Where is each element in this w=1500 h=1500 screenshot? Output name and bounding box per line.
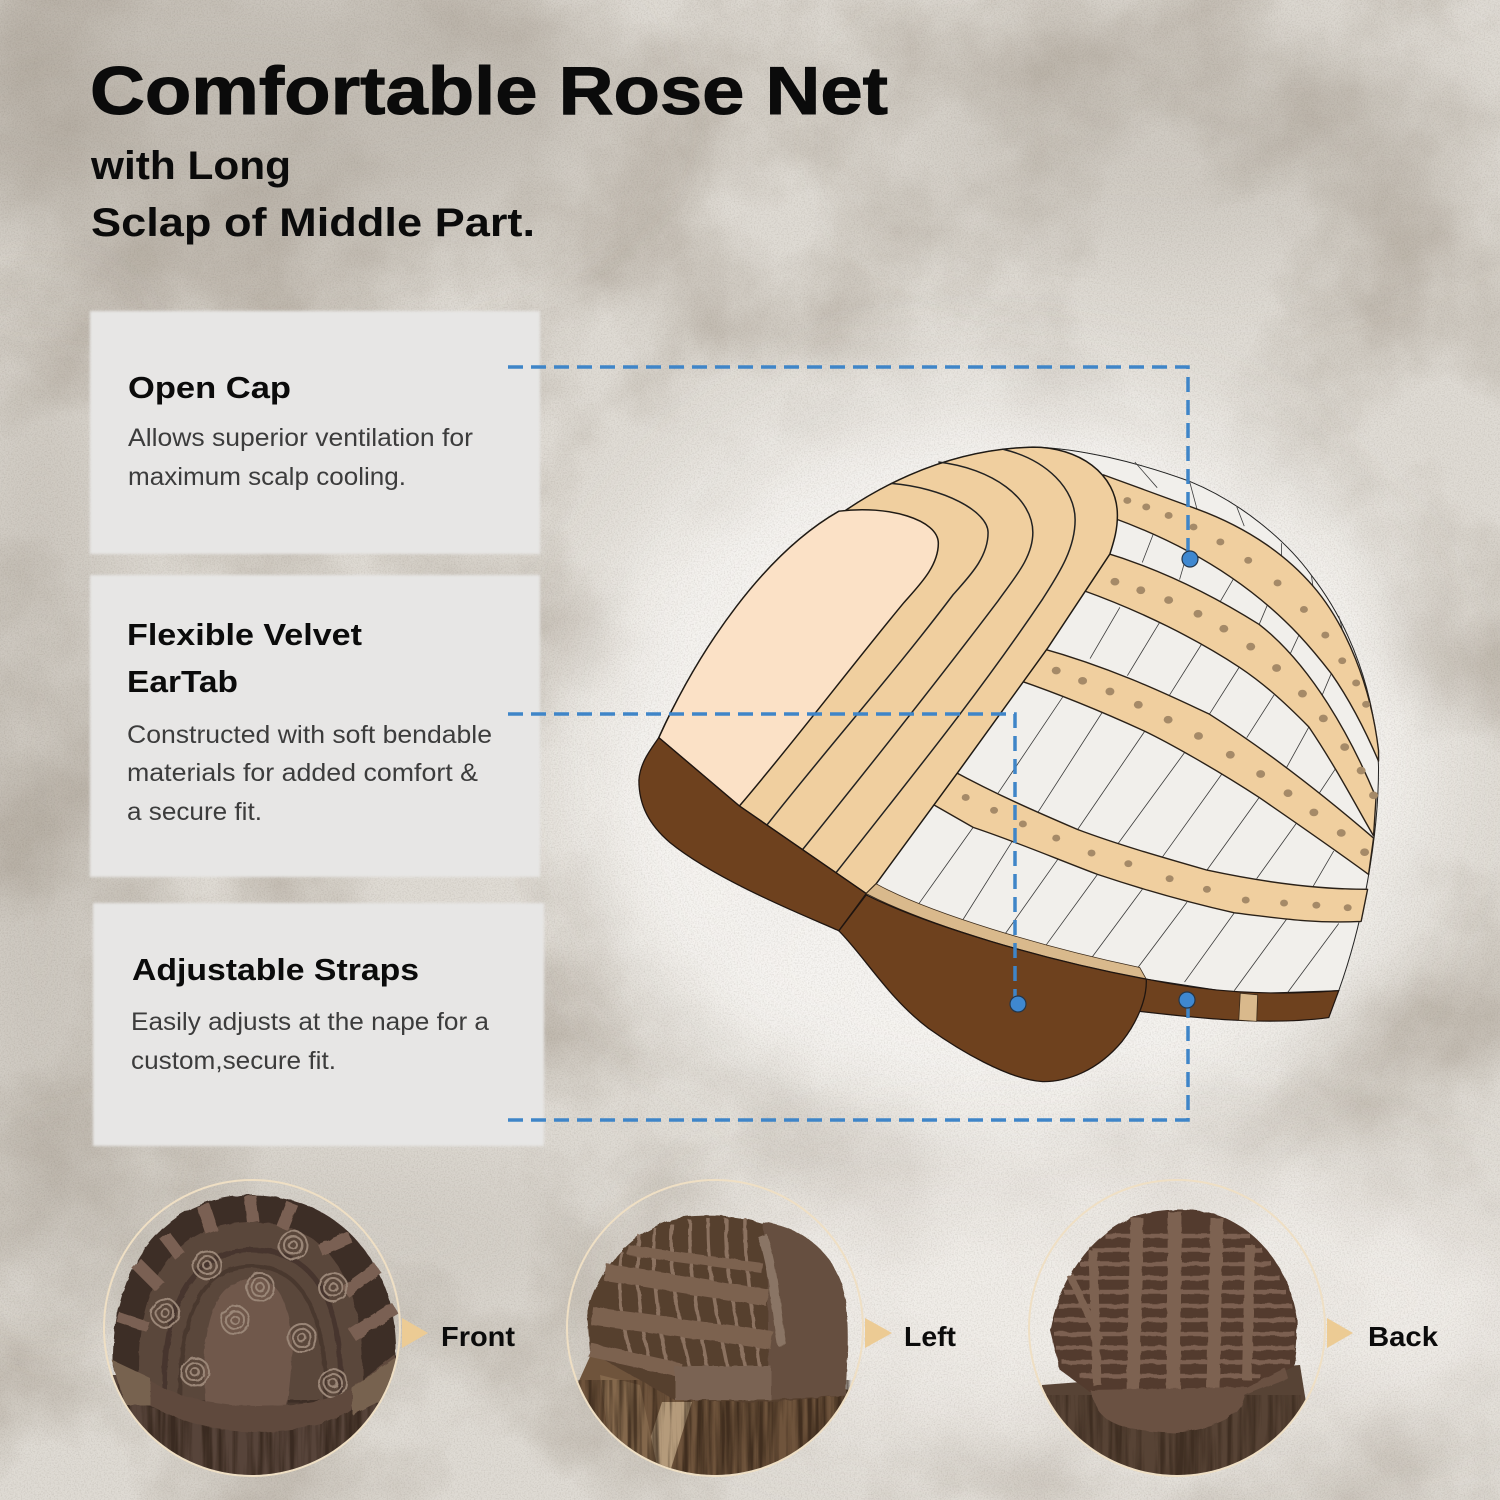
callout line: open cap [508,367,1188,552]
ear tab [675,1366,771,1400]
text: ear tab description: Constructed with soft bendable [127,721,492,749]
strap band 1 [1103,475,1379,761]
rose spirals [151,1231,347,1397]
net rungs [620,1218,760,1370]
vertical straps [1070,1212,1250,1392]
text: open cap description [128,424,473,491]
front brown band [639,738,866,931]
subtitle [90,144,535,245]
lace front tan panel [659,447,1117,894]
arrow: front [402,1318,428,1348]
silk top peach panel [659,510,938,806]
callout line: adjustable straps [508,1003,1188,1120]
strap buckle [1239,993,1258,1021]
subtitle: with Long [90,144,291,188]
arrow: left [865,1318,892,1348]
back adjustable strap [1137,979,1339,1021]
panel: flexible velvet ear tab [90,575,540,877]
cap dome [113,1195,396,1422]
text: open cap description: maximum scalp cooling. [128,463,406,491]
callout dot: open cap [1182,551,1198,567]
text: adjustable straps description: Easily adjusts at the nape for a [131,1008,489,1036]
hair [112,1375,392,1475]
cap dome [1050,1210,1297,1392]
text: adjustable straps description: custom,secure fit. [131,1047,336,1075]
text: ear tab description [127,721,492,826]
net lines [918,462,1342,994]
arrow: back [1327,1318,1353,1348]
center panel [204,1278,292,1410]
heading: flexible velvet ear tab [127,617,362,699]
elastic band [113,1355,400,1432]
callout dot: adjustable straps [1179,992,1195,1008]
heading: adjustable straps: Adjustable Straps [132,952,419,987]
text: adjustable straps description [131,1008,489,1075]
strap band 3 [1018,648,1374,874]
radial straps [118,1196,395,1335]
right lace panel [762,1222,848,1400]
tan edge strip [866,884,1146,979]
text: ear tab description: a secure fit. [127,798,262,826]
lace rings [138,1222,363,1400]
strap band 2 [1083,552,1376,836]
strap perforation dots [962,497,1378,911]
text: open cap description: Allows superior ventilation for [128,424,473,452]
velvet ear tab [839,895,1146,1082]
cap dome [587,1216,847,1402]
title: Comfortable Rose Net [90,53,888,129]
callout dot: ear tab [1010,996,1026,1012]
horizontal rungs [1054,1236,1295,1376]
photo: left view [560,1180,870,1490]
hair [578,1356,852,1475]
hair [1030,1365,1325,1490]
label: front: Front [441,1321,515,1352]
open net base [659,447,1379,994]
label: back: Back [1368,1321,1438,1352]
label: left: Left [904,1321,956,1352]
strap band 4 [928,770,1368,922]
photo: front view [100,1180,405,1485]
cap diagram [639,447,1379,1082]
heading: flexible velvet ear tab: Flexible Velvet [127,617,362,652]
panel: open cap [90,311,540,554]
panel: adjustable straps [93,903,544,1146]
heading: open cap: Open Cap [128,370,291,405]
heading: flexible velvet ear tab: EarTab [127,664,238,699]
panel contour lines [767,449,1075,872]
nape strap [1090,1368,1288,1433]
text: ear tab description: materials for added comfort & [127,759,478,787]
straps [590,1250,772,1370]
callout line: ear tab [508,714,1015,998]
subtitle: Sclap of Middle Part. [91,201,535,245]
photo: back view [1029,1180,1325,1490]
